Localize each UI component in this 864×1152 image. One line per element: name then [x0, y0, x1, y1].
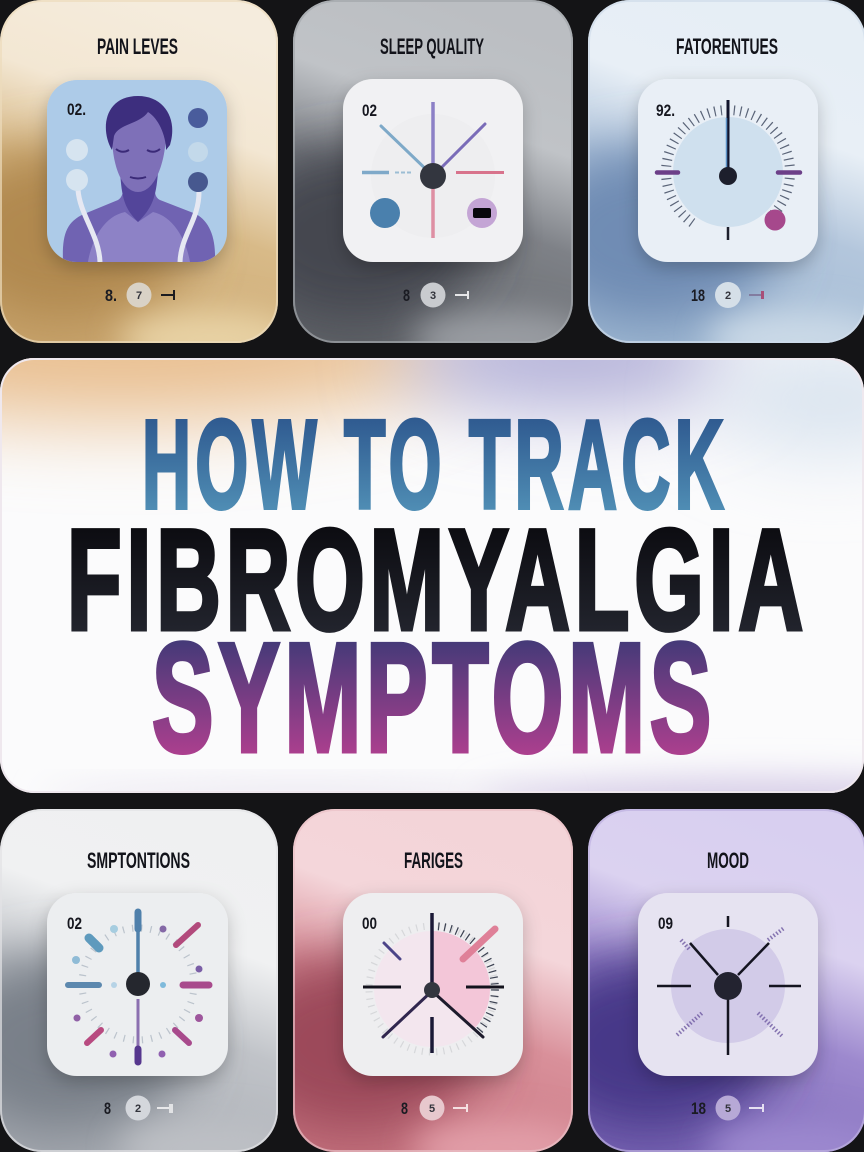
pager: 2 [135, 1103, 141, 1115]
multicolour dial: 02 [67, 914, 82, 933]
pager: 8. [105, 286, 117, 305]
panel: fatorentuees [588, 0, 864, 343]
heading: mood: MOOD [707, 848, 749, 873]
panel: sleep quality [293, 0, 573, 343]
heading: fatorentuees: FATORENTUES [676, 34, 778, 59]
pager: 18 [691, 1099, 706, 1118]
multicolour dial [47, 893, 228, 1076]
pager [691, 1096, 763, 1120]
pager: 3 [430, 290, 436, 302]
illustration: woman with sensors: 02. [67, 100, 86, 119]
pager: 2 [725, 290, 731, 302]
panel: mood [588, 809, 864, 1152]
pager: 18 [691, 286, 705, 305]
heading: fariges: FARIGES [404, 848, 463, 873]
pager [104, 1096, 173, 1120]
clock dial: 02 [362, 101, 377, 120]
pager: 7 [136, 290, 142, 302]
pager [401, 1096, 467, 1120]
radial dial: 09 [658, 914, 673, 933]
clock dial [343, 79, 523, 262]
radial dial [638, 893, 818, 1076]
heading: sleep quality: SLEEP QUALITY [380, 34, 484, 59]
pager [105, 282, 174, 308]
pager: 8 [401, 1099, 408, 1118]
pager: 5 [429, 1103, 435, 1115]
pager: 8 [403, 286, 410, 305]
pager: 5 [725, 1103, 731, 1115]
heading: pain leves: PAIN LEVES [97, 34, 178, 59]
gauge dial [638, 79, 818, 262]
panel: pain levels [0, 0, 278, 343]
gauge dial: 92. [656, 101, 675, 120]
illustration: woman with sensors [47, 80, 227, 262]
heading: smptontions: SMPTONTIONS [87, 848, 190, 873]
pink dial: 00 [362, 914, 377, 933]
panel: fariges [293, 809, 573, 1152]
pager [691, 282, 764, 308]
pink dial [343, 893, 523, 1076]
banner: main title [0, 358, 864, 793]
pager [403, 282, 468, 308]
panel: smptontions [0, 809, 300, 1152]
pager: 8 [104, 1099, 111, 1118]
